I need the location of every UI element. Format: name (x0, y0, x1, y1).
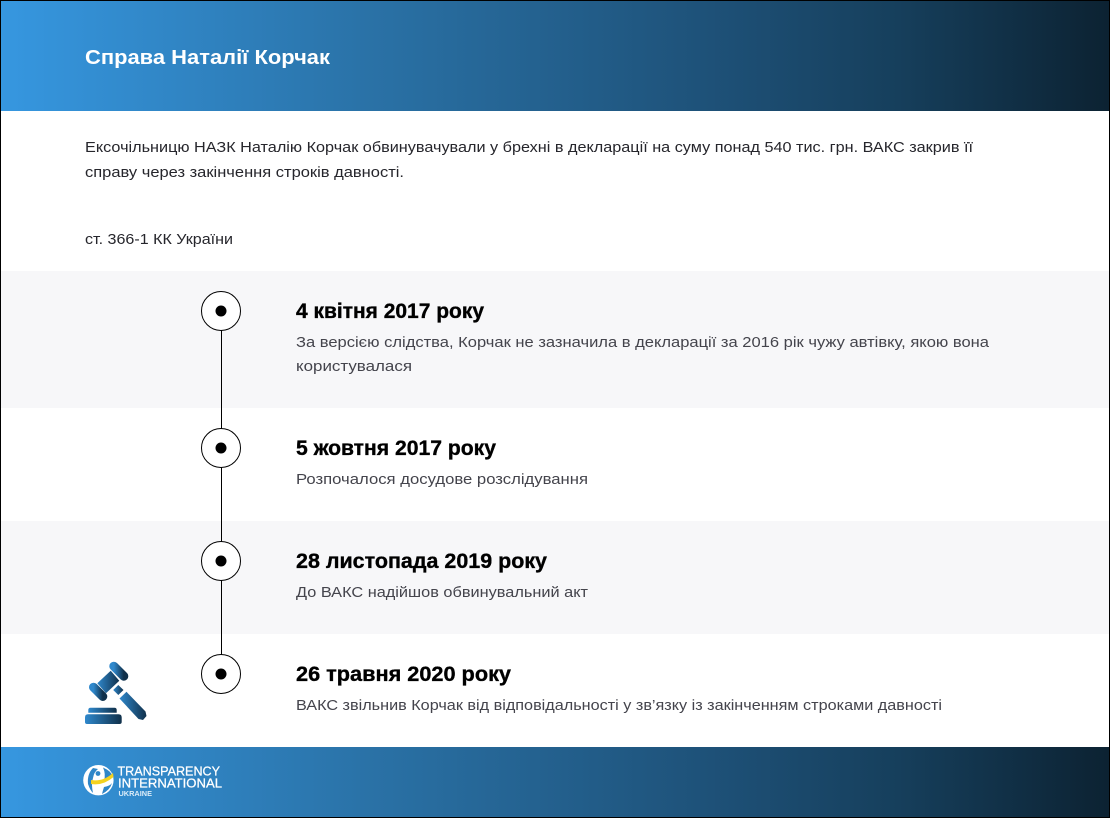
event 3: 28 листопада 2019 року (296, 550, 547, 573)
timeline marker 3 (202, 542, 240, 580)
event 4: 26 травня 2020 року (296, 663, 511, 686)
legal article reference: ст. 366-1 КК України (85, 232, 233, 248)
timeline marker 4 (202, 654, 240, 694)
event 2 (296, 437, 588, 488)
logo: Transparency International Ukraine (83, 764, 222, 798)
logo wordmark: UKRAINE (118, 789, 152, 798)
event 1: користувалася (296, 359, 412, 375)
timeline vertical line (220, 330, 222, 655)
timeline band 1 (1, 271, 1109, 408)
event 3 (296, 550, 588, 601)
event 1: За версією слідства, Корчак не зазначила в декларації за 2016 рік чужу автівку, якою вона (296, 335, 990, 351)
event 1 (296, 300, 990, 375)
intro paragraph (85, 140, 973, 181)
intro paragraph: справу через закінчення строків давності. (85, 165, 404, 181)
event 2: 5 жовтня 2017 року (296, 437, 496, 460)
event 1: 4 квітня 2017 року (296, 300, 484, 323)
event 2: Розпочалося досудове розслідування (296, 472, 588, 488)
logo emblem (83, 765, 114, 795)
logo wordmark: TRANSPARENCY (118, 764, 221, 778)
timeline marker 2 (202, 428, 240, 468)
event 4 (296, 663, 942, 714)
timeline band 3 (1, 521, 1109, 634)
logo wordmark: INTERNATIONAL (118, 776, 222, 790)
event 3: До ВАКС надійшов обвинувальний акт (296, 585, 588, 601)
logo wordmark (118, 764, 222, 798)
title: Справа Наталії Корчак (85, 46, 331, 69)
icon: gavel (85, 662, 146, 724)
timeline marker 1 (202, 292, 240, 330)
footer banner (1, 747, 1109, 817)
header banner (1, 1, 1109, 111)
event 4: ВАКС звільнив Корчак від відповідальності у зв’язку із закінченням строками давності (296, 698, 942, 714)
intro paragraph: Ексочільницю НАЗК Наталію Корчак обвинувачували у брехні в декларації на суму понад 540 тис. грн. ВАКС закрив її (85, 140, 973, 156)
